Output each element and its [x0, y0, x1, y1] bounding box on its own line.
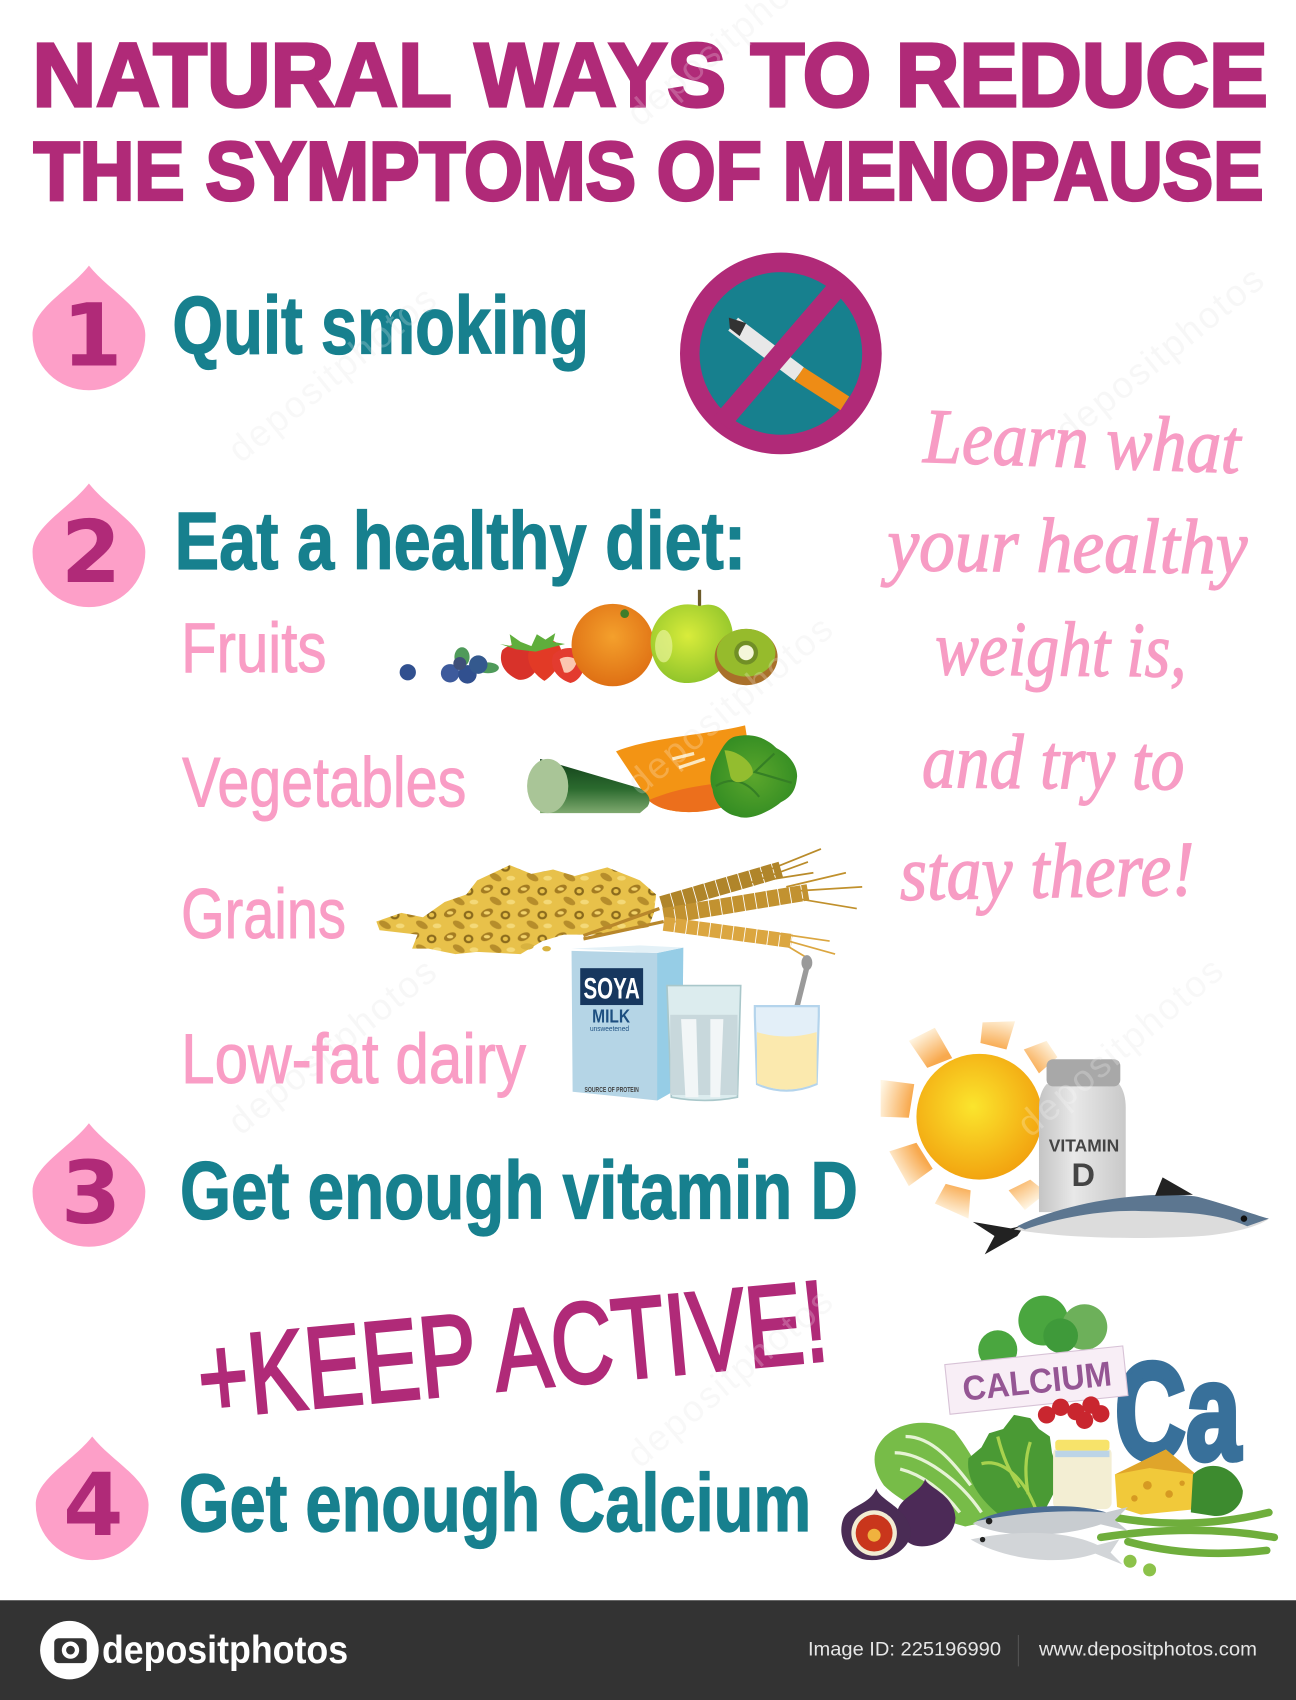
image id: Image ID: 225196990	[808, 1639, 1001, 1661]
vitamin bottle: VITAMIN	[1049, 1135, 1119, 1155]
watermark overlay on artwork: depositphotos	[619, 608, 840, 803]
watermark: depositphotos	[619, 608, 840, 803]
script note: learn your healthy weight: stay there!	[899, 825, 1195, 917]
step 2 heading: eat a healthy diet: Eat a healthy diet:	[175, 496, 746, 587]
step 1 heading: quit smoking: Quit smoking	[172, 280, 589, 371]
vitamin bottle	[1039, 1059, 1126, 1212]
milk jar	[1053, 1440, 1112, 1509]
depositphotos logo: depositphotos	[102, 1629, 348, 1672]
watermark overlay on artwork: depositphotos	[1009, 949, 1231, 1145]
sardines	[971, 1506, 1128, 1564]
website url: www.depositphotos.com	[1038, 1639, 1257, 1661]
watermark: depositphotos	[220, 950, 444, 1142]
watermark: depositphotos	[1009, 949, 1231, 1145]
vitamin bottle: D	[1072, 1157, 1095, 1193]
Ca symbol: Ca	[1115, 1334, 1242, 1489]
script note: learn your healthy weight: your healthy	[881, 500, 1248, 590]
step 2 badge	[33, 484, 145, 607]
watermark	[220, 0, 1271, 1475]
step 3 heading: get enough vitamin D: Get enough vitamin D	[180, 1146, 858, 1237]
calcium label: CALCIUM	[961, 1355, 1114, 1409]
pumpkin	[616, 725, 748, 812]
kiwi	[715, 629, 778, 685]
illustration: vegetables	[527, 725, 797, 818]
food label: low-fat dairy: Low-fat dairy	[181, 1019, 527, 1098]
script note: learn your healthy weight: weight is,	[935, 604, 1187, 694]
step 4 badge: 4	[63, 1455, 123, 1556]
step 4 heading: get enough calcium: Get enough Calcium	[179, 1458, 811, 1549]
illustration: fruits	[400, 590, 778, 686]
watermark: depositphotos	[1047, 259, 1271, 451]
cheese	[1115, 1450, 1196, 1515]
watermark: depositphotos	[619, 1280, 840, 1475]
illustration: grains and wheat	[376, 849, 862, 958]
sun	[881, 1021, 1057, 1219]
illustration: vitamin D	[881, 1021, 1269, 1254]
soya milk carton: SOYA	[583, 974, 640, 1006]
grain heap	[376, 865, 656, 954]
icon: no smoking sign	[690, 262, 872, 445]
food label: fruits: Fruits	[181, 608, 326, 687]
depositphotos logo	[40, 1621, 348, 1679]
step 2 badge: 2	[61, 502, 121, 603]
green pepper	[710, 735, 797, 818]
soya milk carton: MILK	[592, 1005, 631, 1026]
watermark overlay on artwork: depositphotos	[619, 1280, 840, 1475]
script note: learn your healthy weight	[881, 392, 1248, 917]
script note: learn your healthy weight: Learn what	[921, 392, 1244, 490]
title: NATURAL WAYS TO REDUCE	[33, 26, 1268, 126]
footer bar	[0, 1600, 1296, 1700]
soya milk carton: SOURCE OF PROTEIN	[585, 1087, 639, 1094]
title	[33, 26, 1268, 217]
step 1 badge: 1	[62, 285, 122, 386]
blueberries	[400, 647, 499, 684]
peas	[1124, 1555, 1156, 1576]
green leaves	[978, 1296, 1107, 1369]
watermark overlay on artwork	[220, 0, 1231, 1475]
illustration: calcium foods	[841, 1296, 1274, 1576]
step 3 badge: 3	[61, 1143, 121, 1244]
cigarette	[729, 318, 845, 403]
apple	[651, 590, 733, 683]
script note: learn your healthy weight: and try to	[922, 717, 1185, 806]
halved fig	[841, 1489, 911, 1560]
strawberries	[500, 633, 585, 683]
step 4 badge	[36, 1437, 149, 1560]
step 3 badge	[33, 1123, 145, 1247]
loose seeds	[521, 943, 551, 951]
soya milk carton	[572, 945, 683, 1100]
watermark: depositphotos	[220, 278, 444, 470]
illustration: dairy	[572, 945, 819, 1100]
broccoli	[1191, 1466, 1243, 1516]
cabbage	[875, 1423, 1003, 1527]
keep active slogan: +KEEP ACTIVE!	[192, 1257, 833, 1443]
step 1 badge	[33, 266, 145, 390]
wheat ears	[583, 849, 862, 958]
food label: vegetables: Vegetables	[182, 743, 466, 822]
orange	[572, 604, 654, 686]
yogurt jar with spoon	[755, 955, 819, 1091]
red berries	[1038, 1396, 1109, 1429]
soya milk carton: unsweetened	[590, 1024, 629, 1033]
green beans	[1101, 1512, 1274, 1553]
purple fig	[897, 1479, 955, 1546]
glass	[667, 986, 741, 1100]
watermark overlay on artwork: depositphotos	[220, 278, 444, 470]
cucumber	[527, 759, 650, 813]
food label: grains: Grains	[181, 874, 346, 953]
kale	[968, 1415, 1061, 1518]
fish	[973, 1177, 1269, 1254]
